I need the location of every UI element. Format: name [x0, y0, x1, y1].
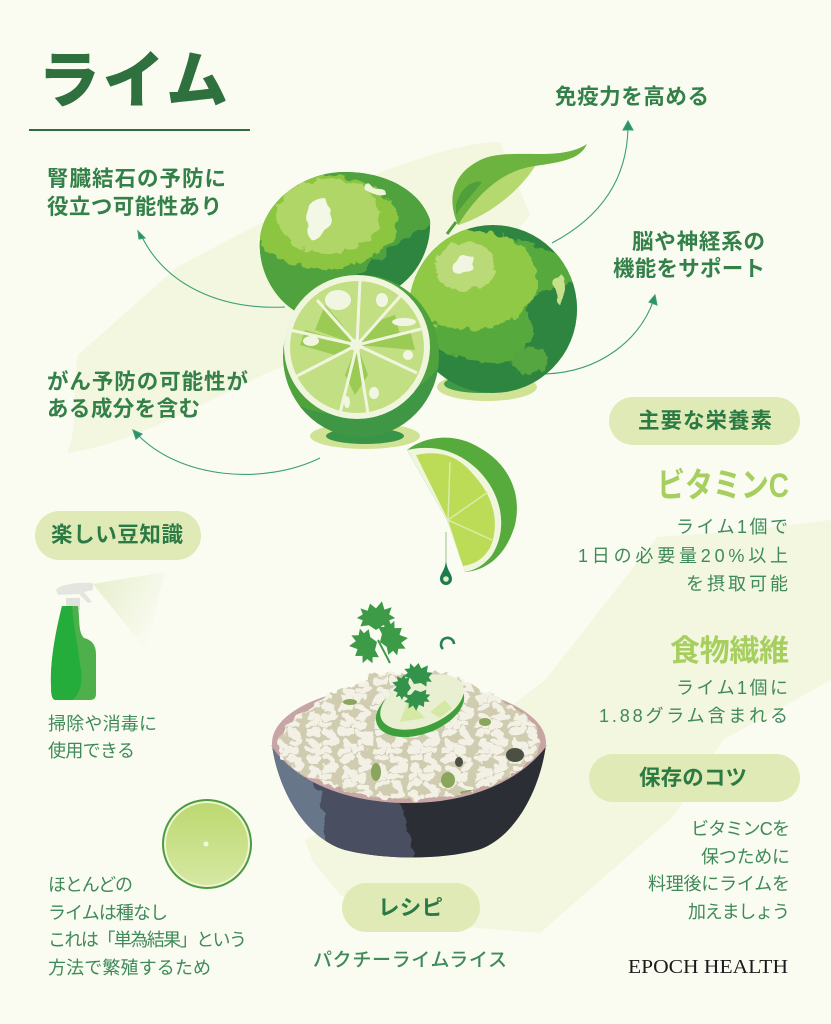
- fact text: seedless: [48, 875, 247, 978]
- nutrient text: fiber: 1.88グラム含まれる: [599, 706, 788, 726]
- storage tips text: 料理後にライムを: [648, 874, 790, 894]
- nutrient text: vitamin C: を摂取可能: [686, 574, 788, 594]
- illustration: back right lime: [410, 225, 577, 393]
- benefit: immunity: 免疫力を高める: [555, 85, 709, 109]
- title: ライム: [38, 47, 228, 116]
- arrow: brain and nerves: [545, 295, 657, 374]
- fact text: seedless: ほとんどの: [48, 875, 133, 895]
- pill: fun facts: [35, 511, 201, 560]
- arrow: immunity: [552, 121, 633, 243]
- pill: storage tips: [589, 754, 800, 802]
- pill: main nutrients: 主要な栄養素: [638, 409, 772, 433]
- storage tips text: 保つために: [701, 847, 790, 867]
- storage tips text: ビタミンCを: [691, 819, 790, 839]
- pill: main nutrients: [609, 397, 800, 445]
- benefit: kidney stones: 役立つ可能性あり: [47, 195, 222, 219]
- illustration: lime wedge: [407, 438, 517, 572]
- fact text: cleaning: [48, 714, 157, 761]
- benefit: brain and nerves: [613, 230, 765, 281]
- recipe name: パクチーライムライス: [313, 949, 507, 971]
- icon: lime slice: [162, 799, 252, 889]
- arrow: cancer: [133, 430, 320, 474]
- benefit: brain and nerves: 機能をサポート: [613, 257, 765, 281]
- illustration: cut lime: [283, 275, 439, 432]
- title underline: [29, 129, 250, 131]
- pill: recipe: [342, 883, 480, 932]
- cilantro on lime: [391, 657, 437, 713]
- storage tips text: 加えましょう: [688, 902, 790, 922]
- lime slice on rice: [368, 663, 472, 748]
- pill: fun facts: 楽しい豆知識: [51, 523, 183, 547]
- icon: spray bottle: [51, 572, 165, 700]
- fact text: seedless: 方法で繁殖するため: [48, 957, 211, 978]
- illustration: leaf: [447, 144, 587, 234]
- fact text: seedless: これは「単為結果」という: [48, 930, 247, 950]
- benefit: kidney stones: 腎臓結石の予防に: [47, 167, 226, 191]
- illustration: rice bowl: [271, 663, 547, 858]
- illustration: shadow under cut lime: [310, 423, 420, 449]
- illustration: shadow under right lime: [437, 373, 537, 401]
- illustration: back left lime: [260, 172, 430, 310]
- illustration: cilantro sprig: [345, 601, 412, 669]
- benefit: cancer: がん予防の可能性が: [47, 369, 248, 394]
- brand logo: EPOCH HEALTH: [628, 956, 788, 978]
- nutrient text: fiber: ライム1個に: [676, 678, 788, 698]
- pill: recipe: レシピ: [378, 896, 443, 920]
- nutrient text: fiber: [599, 678, 788, 726]
- nutrient text: vitamin C: ライム1個で: [676, 517, 788, 537]
- nutrient text: vitamin C: [578, 517, 788, 594]
- benefit: kidney stones: [47, 167, 226, 219]
- benefit: cancer: ある成分を含む: [47, 397, 200, 421]
- nutrient heading: fiber: 食物繊維: [670, 635, 789, 668]
- pill: storage tips: 保存のコツ: [639, 766, 747, 790]
- benefit: brain and nerves: 脳や神経系の: [632, 230, 765, 254]
- benefit: cancer: [47, 369, 248, 421]
- nutrient text: vitamin C: 1日の必要量20%以上: [578, 546, 788, 566]
- storage tips text: [648, 819, 790, 922]
- background brush strokes: [67, 142, 831, 933]
- nutrient heading: vitamin C: ビタミンC: [657, 467, 789, 505]
- fact text: seedless: ライムは種なし: [48, 903, 168, 923]
- fact text: cleaning: 掃除や消毒に: [48, 714, 157, 734]
- arrow: kidney stones: [138, 231, 285, 307]
- illustration: second drop: [441, 638, 454, 649]
- fact text: cleaning: 使用できる: [48, 741, 135, 761]
- illustration: falling drop: [440, 532, 452, 585]
